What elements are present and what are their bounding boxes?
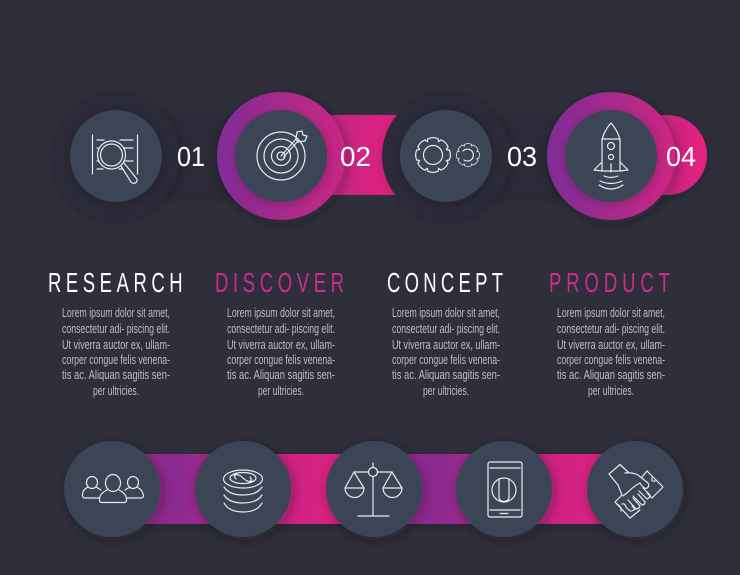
icon: balance scales: [345, 463, 402, 516]
text block: concept: tis ac. Aliquan sagitis sen-: [392, 368, 500, 382]
bottom ribbon: [112, 454, 635, 524]
text block: product: Lorem ipsum dolor sit amet,: [557, 306, 665, 320]
icon: rocket: [594, 123, 628, 189]
step 04 icon disc: [565, 110, 657, 202]
bottom disc 2: [195, 441, 291, 537]
text block: product: consectetur adi- piscing elit.: [557, 322, 665, 336]
bottom disc 3: [326, 441, 422, 537]
icon: magnifier over document: [92, 135, 138, 183]
text block: product: per ultricies.: [588, 384, 634, 398]
text block: research: consectetur adi- piscing elit.: [62, 322, 170, 336]
text block: concept: [392, 306, 500, 398]
pink band: step 04: [611, 115, 707, 195]
step 04 gradient ring: [547, 92, 675, 220]
panel: step 03 and 04 connector band: [446, 115, 616, 195]
text block: product: Ut viverra auctor ex, ullam-: [557, 338, 665, 352]
text block: concept: corper congue felis venena-: [392, 353, 500, 367]
icon: smartphone: [488, 462, 522, 517]
text block: product: tis ac. Aliquan sagitis sen-: [557, 368, 665, 382]
number 04: 04: [666, 141, 696, 172]
text block: research: [62, 306, 170, 398]
heading: product: PRODUCT: [549, 268, 670, 299]
heading: concept: CONCEPT: [387, 268, 503, 299]
text block: research: corper congue felis venena-: [62, 353, 170, 367]
step 02 gradient ring: [217, 92, 345, 220]
step 01 icon disc: [70, 110, 162, 202]
text block: concept: consectetur adi- piscing elit.: [392, 322, 500, 336]
panel: step 01 and 02 connector band: [116, 115, 286, 195]
text block: discover: consectetur adi- piscing elit.: [227, 322, 335, 336]
bottom disc 5: [587, 441, 683, 537]
number 03: 03: [507, 141, 537, 172]
text block: research: Ut viverra auctor ex, ullam-: [62, 338, 170, 352]
icon: coin stack: [224, 470, 262, 512]
icon: gears: [416, 138, 479, 172]
text block: discover: corper congue felis venena-: [227, 353, 335, 367]
number 02: 02: [340, 141, 371, 172]
text block: research: Lorem ipsum dolor sit amet,: [62, 306, 170, 320]
text block: discover: Ut viverra auctor ex, ullam-: [227, 338, 335, 352]
text block: concept: Ut viverra auctor ex, ullam-: [392, 338, 500, 352]
pink band: step 02: [281, 115, 401, 195]
heading: research: RESEARCH: [48, 268, 183, 299]
icon: people group: [82, 474, 144, 502]
heading: discover: DISCOVER: [215, 268, 344, 299]
bottom disc 4: [456, 441, 552, 537]
text block: concept: per ultricies.: [423, 384, 469, 398]
bottom disc 1: [64, 441, 160, 537]
text block: research: tis ac. Aliquan sagitis sen-: [62, 368, 170, 382]
text block: discover: Lorem ipsum dolor sit amet,: [227, 306, 335, 320]
step 03 outer ring: [382, 92, 510, 220]
icon: target with dart: [257, 131, 307, 180]
text block: concept: Lorem ipsum dolor sit amet,: [392, 306, 500, 320]
step 01 outer ring: [52, 92, 180, 220]
text block: research: per ultricies.: [93, 384, 139, 398]
text block: product: [557, 306, 665, 398]
step 02 icon disc: [235, 110, 327, 202]
text block: discover: tis ac. Aliquan sagitis sen-: [227, 368, 335, 382]
text block: discover: [227, 306, 335, 398]
icon: handshake: [609, 464, 663, 518]
text block: discover: per ultricies.: [258, 384, 304, 398]
text block: product: corper congue felis venena-: [557, 353, 665, 367]
number 01: 01: [177, 141, 205, 172]
step 03 icon disc: [400, 110, 492, 202]
